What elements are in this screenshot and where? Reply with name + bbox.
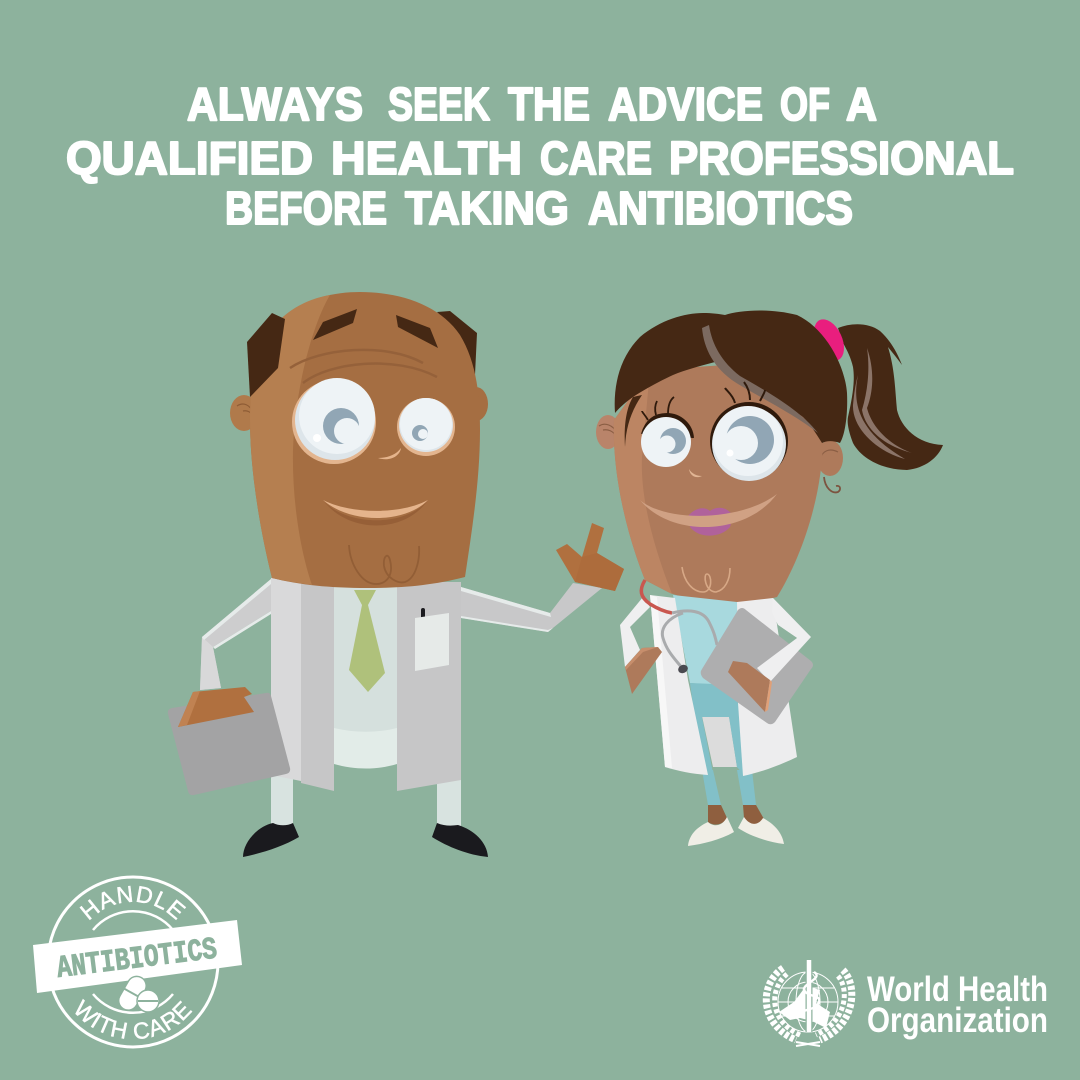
doctor smile — [323, 500, 428, 526]
doctor eyebrows — [313, 309, 438, 348]
doctor clipboard — [168, 693, 290, 795]
WHO wordmark — [867, 970, 1048, 1040]
tablet — [701, 608, 813, 724]
stethoscope — [641, 580, 717, 675]
title: ANTIBIOTICS — [588, 182, 853, 234]
right arm — [757, 598, 811, 682]
doctor shoes — [243, 823, 488, 857]
badge bottom text: WITH CARE — [75, 998, 192, 1039]
ears — [596, 415, 843, 476]
badge banner text: ANTIBIOTICS — [55, 933, 219, 987]
scrunchie — [808, 315, 850, 365]
badge pills icon — [115, 973, 159, 1014]
badge top text: HANDLE — [80, 886, 186, 920]
doctor legs — [271, 770, 461, 827]
doctor tie — [349, 590, 385, 692]
WHO wordmark: World Health — [867, 970, 1048, 1009]
doctor raised hand — [556, 523, 624, 591]
title: ADVICE — [608, 78, 763, 130]
doctor ears — [230, 387, 488, 431]
shoes — [688, 817, 784, 846]
doctor raised arm highlight — [461, 587, 553, 632]
WHO continents — [779, 986, 830, 1028]
WHO logo — [766, 960, 1048, 1046]
coat panels — [650, 595, 797, 776]
doctor right eye — [397, 398, 455, 456]
legs — [702, 770, 764, 825]
title: TAKING — [405, 182, 569, 234]
hair highlight — [702, 325, 818, 433]
doctor pocket with pen — [415, 608, 449, 671]
title: CARE — [540, 132, 652, 184]
title: SEEK — [388, 78, 490, 130]
WHO staff and serpent — [802, 960, 819, 1032]
doctor shirt — [330, 580, 400, 768]
WHO wordmark: Organization — [867, 1001, 1048, 1040]
doctor coat — [271, 578, 461, 791]
nose — [689, 469, 702, 477]
lips — [688, 508, 733, 536]
title: PROFESSIONAL — [669, 132, 1014, 184]
doctor left arm — [200, 579, 271, 690]
title: THE — [508, 78, 590, 130]
chin — [682, 567, 730, 592]
doctor raised arm — [461, 583, 602, 632]
badge: handle antibiotics with care — [33, 876, 242, 1048]
earring — [824, 477, 840, 492]
title — [66, 78, 1014, 234]
doctor chin — [349, 545, 419, 584]
right hand — [728, 661, 772, 712]
WHO emblem — [766, 960, 852, 1046]
title: OF — [780, 78, 830, 130]
inner coat — [702, 716, 737, 767]
title: HEALTH — [331, 132, 522, 184]
doctor forehead wrinkles — [290, 350, 437, 383]
title: A — [846, 78, 877, 130]
WHO globe — [778, 972, 838, 1032]
left arm — [620, 597, 650, 667]
male doctor character — [168, 292, 624, 857]
doctor left side hair — [247, 313, 285, 397]
female doctor character — [596, 310, 943, 846]
doctor nose — [378, 448, 401, 459]
doctor left eye — [292, 378, 376, 464]
badge rings — [48, 877, 218, 1047]
badge banner — [33, 920, 242, 993]
right eye with lashes — [710, 382, 788, 481]
hair — [615, 310, 847, 447]
doctor head — [250, 292, 480, 588]
smile — [640, 494, 777, 527]
WHO wreath — [766, 968, 852, 1046]
title: BEFORE — [225, 182, 387, 234]
ponytail — [838, 324, 943, 470]
scrub pants — [690, 683, 744, 775]
doctor right side hair — [437, 311, 477, 375]
left eye with lashes — [641, 397, 693, 467]
head — [614, 360, 823, 602]
left hand — [625, 647, 662, 694]
doctor hand on clipboard — [178, 687, 254, 727]
scrub top — [673, 595, 738, 687]
title: QUALIFIED — [66, 132, 313, 184]
title: ALWAYS — [187, 78, 363, 130]
